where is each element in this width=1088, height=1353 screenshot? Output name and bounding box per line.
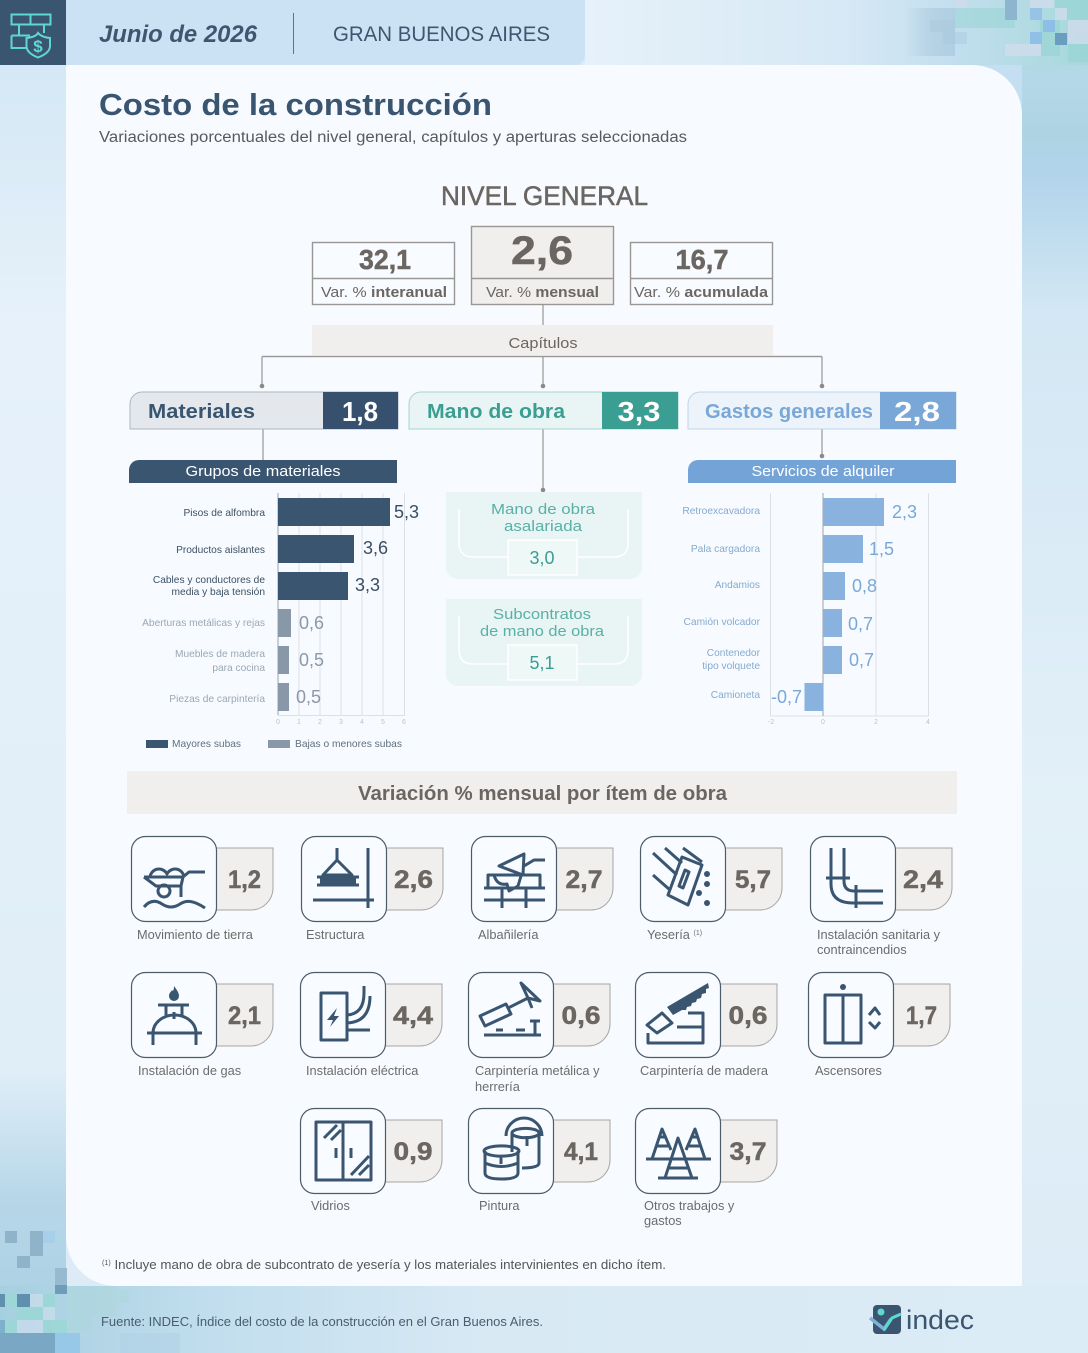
bar chart: grupos de materiales: 5,3 [394, 502, 419, 522]
title: Costo de la construcción [99, 87, 492, 122]
item: yesería: 5,7 [735, 866, 771, 894]
item: instalación sanitaria [810, 836, 952, 957]
bar chart: grupos de materiales: 5 [381, 719, 385, 726]
item: ascensores: 1,7 [906, 1002, 937, 1030]
item: instalación sanitaria: contraincendios [817, 942, 907, 957]
panel: mano de obra asalariada: Mano de obra [491, 501, 596, 518]
bar chart: grupos de materiales: Productos aislantes [176, 545, 265, 556]
panel: mano de obra asalariada: asalariada [504, 518, 583, 535]
bar chart: grupos de materiales: 3 [339, 719, 343, 726]
chapter: gastos generales [688, 392, 956, 429]
panel: subcontratos de mano de obra [446, 599, 642, 686]
footnote: Incluye mano de obra de subcontrato de yesería y los materiales intervinientes en dicho ítem. [111, 1257, 666, 1272]
item: otros trabajos y gastos: 3,7 [730, 1138, 766, 1166]
item: albañilería: 2,7 [566, 866, 602, 894]
item: yesería [640, 836, 782, 942]
item: otros trabajos y gastos: gastos [644, 1213, 682, 1228]
bar chart: grupos de materiales: Aberturas metálicas y rejas [142, 618, 265, 629]
box: var acumulada: 16,7 [676, 244, 728, 275]
band: capítulos [262, 325, 822, 356]
icon: trowel and bricks [484, 854, 545, 908]
box: var interanual [312, 242, 455, 304]
bar chart: servicios de alquiler: 2,3 [892, 502, 917, 522]
bar chart: servicios de alquiler: Camión volcador [684, 617, 761, 628]
box: var mensual [471, 226, 614, 304]
item: carpintería de madera: 0,6 [728, 1002, 768, 1030]
legend: Mayores subas [172, 738, 241, 750]
icon: pipes [826, 848, 883, 908]
item: carpintería metálica [468, 972, 610, 1094]
bar chart: servicios de alquiler: 0 [821, 719, 825, 726]
item: pintura [468, 1108, 610, 1213]
item: yesería: Yesería [647, 927, 690, 942]
item: carpintería de madera: Carpintería de madera [640, 1063, 769, 1078]
bar chart: servicios de alquiler: 0,8 [852, 576, 877, 596]
item: vidrios: 0,9 [394, 1138, 432, 1166]
bar chart: servicios de alquiler: tipo volquete [702, 661, 760, 672]
bar chart: grupos de materiales: 0,5 [296, 687, 321, 707]
bar chart: grupos de materiales: 1 [297, 719, 301, 726]
bar chart: grupos de materiales: Pisos de alfombra [183, 508, 265, 519]
icon: gas valve [147, 986, 202, 1045]
legend: Bajas o menores subas [295, 738, 402, 750]
item: instalación eléctrica: 4,4 [393, 1002, 433, 1030]
chapter: mano de obra: 3,3 [618, 396, 660, 427]
item: otros trabajos y gastos: Otros trabajos y [644, 1198, 735, 1213]
item: otros trabajos y gastos [636, 1108, 777, 1228]
main white panel [66, 65, 1022, 1286]
item: instalación sanitaria: 2,4 [903, 866, 943, 894]
chapter: mano de obra: Mano de obra [427, 401, 566, 423]
panel: mano de obra asalariada [446, 492, 642, 579]
item: instalación eléctrica [300, 972, 442, 1078]
item: instalación eléctrica: Instalación eléctrica [306, 1063, 419, 1078]
icon: traffic cones [646, 1129, 711, 1178]
item: pintura: 4,1 [564, 1138, 598, 1166]
bar chart: grupos de materiales: 3,3 [355, 575, 380, 595]
logo: indec: indec [906, 1305, 974, 1335]
bar chart: grupos de materiales: Piezas de carpintería [169, 694, 265, 705]
icon: saw [647, 983, 709, 1043]
item: vidrios [300, 1108, 442, 1213]
bar chart: grupos de materiales: 0,6 [299, 613, 324, 633]
bar chart: grupos de materiales: media y baja tensión [172, 587, 265, 598]
icon: bricks and dollar shield [0, 0, 66, 65]
item: carpintería metálica: 0,6 [562, 1002, 600, 1030]
bar chart: servicios de alquiler: Contenedor [707, 648, 761, 659]
connector lines [260, 305, 824, 492]
bar chart: servicios de alquiler: 2 [874, 719, 878, 726]
bar chart: grupos de materiales: Muebles de madera [175, 649, 265, 660]
bar chart: grupos de materiales: 4 [360, 719, 364, 726]
heading: nivel general: NIVEL GENERAL [441, 181, 648, 211]
panel: subcontratos de mano de obra: 5,1 [529, 653, 555, 673]
item: vidrios: Vidrios [311, 1198, 350, 1213]
item: pintura: Pintura [479, 1198, 520, 1213]
bar chart: grupos de materiales [142, 493, 419, 726]
bar chart: grupos de materiales: 0 [276, 719, 280, 726]
icon: bricks and dollar shield: $ [33, 37, 43, 56]
item: albañilería: Albañilería [478, 927, 539, 942]
chapter: mano de obra [409, 392, 678, 429]
band: variación mensual por ítem: Variación % mensual por ítem de obra [358, 783, 728, 805]
header bar [0, 0, 585, 65]
panel: subcontratos de mano de obra: de mano de obra [480, 623, 605, 640]
item: instalación sanitaria: Instalación sanitaria y [817, 927, 941, 942]
date: Junio de 2026 [99, 21, 258, 48]
band: variación mensual por ítem [127, 771, 957, 814]
bar chart: servicios de alquiler: -2 [768, 719, 774, 726]
footnote: (1) [102, 1260, 111, 1267]
bar chart: servicios de alquiler: 1,5 [869, 539, 894, 559]
bar chart: grupos de materiales: para cocina [212, 663, 265, 674]
subtitle: Variaciones porcentuales del nivel general, capítulos y aperturas seleccionadas [99, 129, 687, 146]
item: ascensores: Ascensores [815, 1063, 882, 1078]
icon: elevator [825, 984, 880, 1043]
chapter: materiales: 1,8 [342, 396, 378, 427]
item: carpintería metálica: herrería [475, 1079, 521, 1094]
box: var acumulada: Var. % acumulada [634, 284, 769, 301]
bar chart: grupos de materiales: 3,6 [363, 538, 388, 558]
box: var mensual: Var. % mensual [486, 284, 599, 301]
item: movimiento de tierra [132, 836, 273, 942]
icon: glass door [316, 1122, 371, 1180]
icon: welding torch [480, 983, 541, 1035]
box: var interanual: Var. % interanual [321, 284, 447, 301]
item: albañilería [472, 836, 613, 942]
heading: grupos de materiales [129, 460, 397, 483]
chapter: gastos generales: 2,8 [894, 396, 940, 427]
icon: crane beam [313, 848, 374, 908]
bar chart: grupos de materiales: Cables y conductores de [153, 575, 265, 586]
bar chart: servicios de alquiler: Andamios [715, 580, 760, 591]
item: instalación de gas: 2,1 [228, 1002, 261, 1030]
icon: wheelbarrow [144, 869, 205, 908]
item: carpintería metálica: Carpintería metálica y [475, 1063, 600, 1078]
bar chart: grupos de materiales: 2 [318, 719, 322, 726]
heading: grupos de materiales: Grupos de materiales [186, 463, 340, 480]
logo: indec [870, 1305, 974, 1335]
chapter: gastos generales: Gastos generales [705, 401, 873, 423]
item: estructura [302, 836, 443, 942]
bar chart: servicios de alquiler: 0,7 [849, 650, 874, 670]
item: movimiento de tierra: Movimiento de tierra [137, 927, 254, 942]
bar chart: servicios de alquiler [682, 493, 930, 726]
item: estructura: 2,6 [394, 866, 433, 894]
bar chart: servicios de alquiler: Camioneta [711, 690, 760, 701]
heading: servicios de alquiler: Servicios de alquiler [752, 463, 895, 480]
item: yesería: (1) [693, 930, 702, 937]
chapter: materiales: Materiales [148, 401, 255, 423]
icon: plastering spatula [653, 848, 710, 906]
item: movimiento de tierra: 1,2 [228, 866, 261, 894]
legend [146, 738, 402, 750]
item: ascensores [808, 972, 950, 1078]
bar chart: servicios de alquiler: Retroexcavadora [682, 506, 760, 517]
panel: mano de obra asalariada: 3,0 [529, 548, 555, 568]
icon: electric panel [321, 986, 370, 1040]
heading: servicios de alquiler [688, 460, 956, 483]
bar chart: servicios de alquiler: Pala cargadora [691, 544, 760, 555]
bar chart: servicios de alquiler: 0,7 [848, 614, 873, 634]
item: carpintería de madera [636, 972, 777, 1078]
chapter: materiales [130, 392, 398, 429]
source: Fuente: INDEC, Índice del costo de la construcción en el Gran Buenos Aires. [101, 1314, 543, 1329]
box: var interanual: 32,1 [359, 244, 411, 275]
bar chart: grupos de materiales: 6 [402, 719, 406, 726]
band: capítulos: Capítulos [508, 336, 578, 352]
bar chart: grupos de materiales: 0,5 [299, 650, 324, 670]
box: var acumulada [630, 242, 773, 304]
bar chart: servicios de alquiler: 4 [926, 719, 930, 726]
item: instalación de gas [132, 972, 273, 1078]
bar chart: servicios de alquiler: -0,7 [771, 687, 802, 707]
icon: paint cans [484, 1118, 542, 1179]
item: estructura: Estructura [306, 927, 365, 942]
region: GRAN BUENOS AIRES [333, 23, 550, 46]
item: instalación de gas: Instalación de gas [138, 1063, 241, 1078]
panel: subcontratos de mano de obra: Subcontratos [493, 606, 591, 623]
box: var mensual: 2,6 [511, 229, 573, 273]
